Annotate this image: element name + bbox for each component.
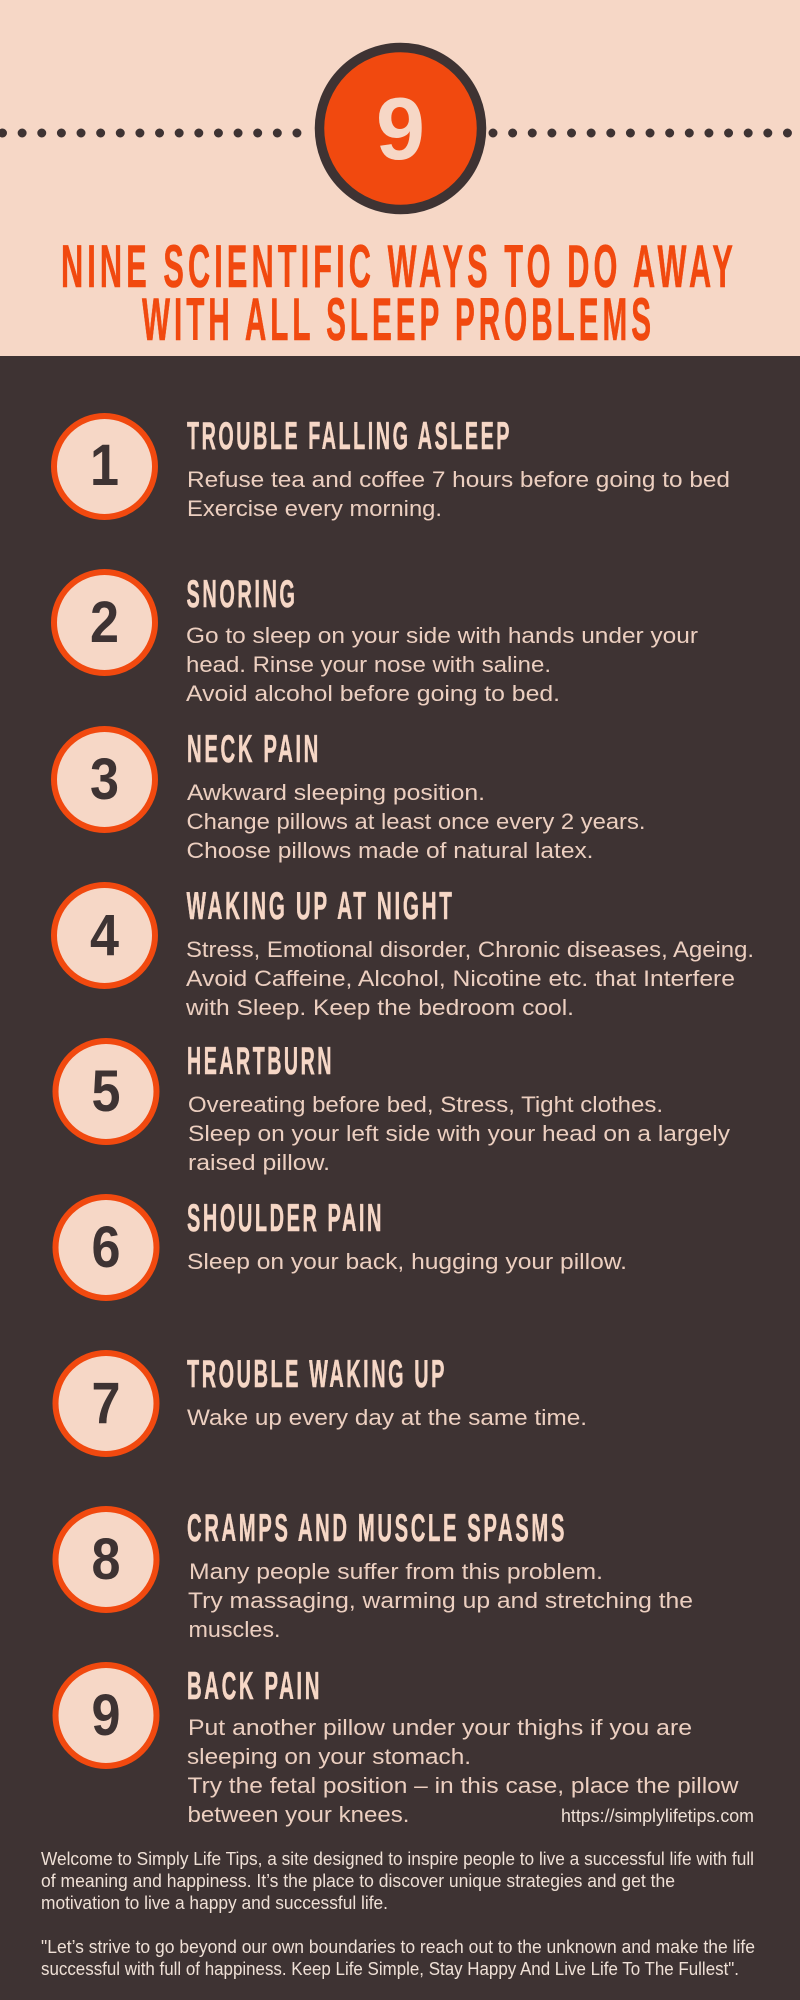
item 1: trouble falling asleep	[54, 415, 730, 521]
item 5: heartburn: 5	[92, 1059, 120, 1124]
item 4: waking up at night	[54, 885, 754, 1020]
item 2: snoring: SNORING	[186, 573, 298, 616]
item 6: shoulder pain: 6	[92, 1215, 120, 1280]
item 2: snoring: 2	[90, 590, 119, 655]
item 5: heartburn: raised pillow.	[188, 1150, 330, 1175]
item 3: neck pain	[54, 728, 646, 863]
item 7: trouble waking up: Wake up every day at the same time.	[187, 1405, 587, 1430]
item 4: waking up at night: WAKING UP AT NIGHT	[186, 885, 454, 928]
item 6: shoulder pain: Sleep on your back, hugging your pillow.	[187, 1249, 627, 1274]
item 3: neck pain: Choose pillows made of natural latex.	[186, 838, 594, 863]
badge: big number 9	[320, 48, 482, 210]
item 5: heartburn: HEARTBURN	[187, 1040, 334, 1083]
footer text: welcome paragraph: of meaning and happiness. It’s the place to discover unique strategies and get the	[41, 1871, 675, 1891]
item 9: back pain	[56, 1665, 739, 1827]
item 2: snoring: Avoid alcohol before going to bed.	[186, 681, 560, 706]
item 7: trouble waking up: TROUBLE WAKING UP	[187, 1353, 447, 1396]
badge: big number 9: 9	[376, 79, 425, 178]
footer text: quote: successful with full of happiness. Keep Life Simple, Stay Happy And Live Life To The Fullest".	[41, 1959, 739, 1979]
item 9: back pain: BACK PAIN	[187, 1665, 322, 1708]
footer text: welcome paragraph: Welcome to Simply Life Tips, a site designed to inspire people to live a successful life with full	[41, 1849, 754, 1869]
item 4: waking up at night: Stress, Emotional disorder, Chronic diseases, Ageing.	[186, 937, 754, 962]
item 5: heartburn: Sleep on your left side with your head on a largely	[188, 1121, 730, 1146]
item 5: heartburn	[56, 1040, 730, 1175]
item 6: shoulder pain	[56, 1197, 627, 1298]
item 8: cramps and muscle spasms: 8	[92, 1527, 120, 1592]
website url: https://simplylifetips.com	[561, 1806, 754, 1826]
item 4: waking up at night: 4	[90, 903, 119, 968]
item 1: trouble falling asleep: Exercise every morning.	[187, 496, 442, 521]
title	[61, 233, 737, 353]
item 8: cramps and muscle spasms	[56, 1507, 693, 1642]
footer text: welcome paragraph: motivation to live a happy and successful life.	[41, 1893, 388, 1913]
item 3: neck pain: NECK PAIN	[187, 728, 321, 771]
item 9: back pain: 9	[92, 1683, 120, 1748]
panel: header	[0, 0, 800, 356]
item 1: trouble falling asleep: Refuse tea and coffee 7 hours before going to bed	[187, 467, 730, 492]
item 1: trouble falling asleep: 1	[90, 433, 119, 498]
item 9: back pain: Try the fetal position – in this case, place the pillow	[188, 1773, 739, 1798]
item 8: cramps and muscle spasms: Many people suffer from this problem.	[189, 1559, 603, 1584]
item 9: back pain: Put another pillow under your thighs if you are	[188, 1715, 692, 1740]
item 2: snoring	[54, 572, 698, 706]
item 3: neck pain: 3	[90, 747, 119, 812]
item 9: back pain: between your knees.	[188, 1802, 410, 1827]
item 3: neck pain: Awkward sleeping position.	[187, 780, 485, 805]
item 5: heartburn: Overeating before bed, Stress, Tight clothes.	[188, 1092, 663, 1117]
dotted line left	[2, 128, 316, 138]
item 8: cramps and muscle spasms: muscles.	[188, 1617, 280, 1642]
item 4: waking up at night: Avoid Caffeine, Alcohol, Nicotine etc. that Interfere	[186, 966, 735, 991]
footer text: quote: "Let’s strive to go beyond our own boundaries to reach out to the unknown and make the life	[41, 1937, 755, 1957]
item 8: cramps and muscle spasms: Try massaging, warming up and stretching the	[188, 1588, 693, 1613]
item 9: back pain: sleeping on your stomach.	[187, 1744, 471, 1769]
footer text: welcome paragraph	[41, 1849, 754, 1913]
item 4: waking up at night: with Sleep. Keep the bedroom cool.	[185, 995, 574, 1020]
item 7: trouble waking up	[56, 1353, 587, 1454]
item 2: snoring: head. Rinse your nose with saline.	[186, 652, 551, 677]
item 2: snoring: Go to sleep on your side with hands under your	[186, 623, 698, 648]
footer text: quote	[41, 1937, 755, 1979]
item 6: shoulder pain: SHOULDER PAIN	[187, 1197, 384, 1240]
item 3: neck pain: Change pillows at least once every 2 years.	[186, 809, 646, 834]
dotted line right	[493, 128, 790, 138]
item 7: trouble waking up: 7	[92, 1371, 120, 1436]
